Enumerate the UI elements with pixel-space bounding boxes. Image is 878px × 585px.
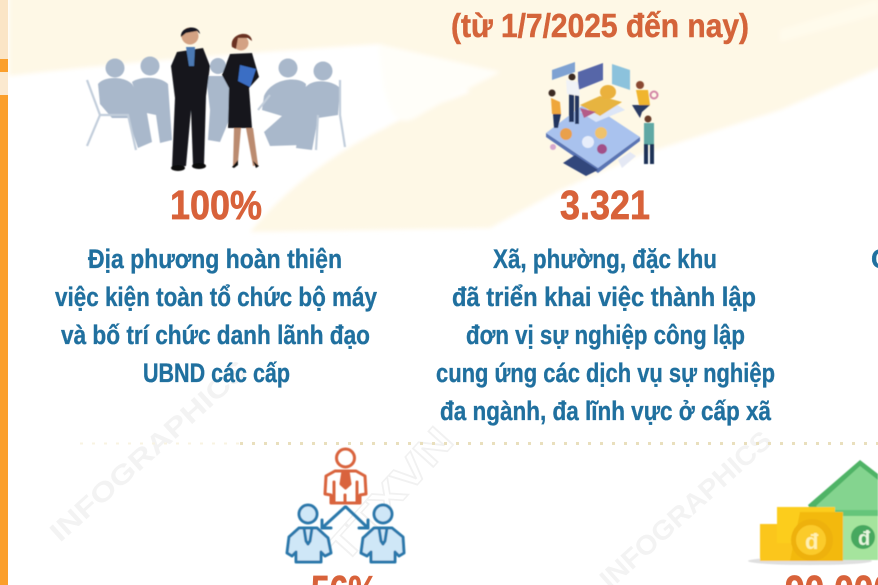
icon: money and coins: đ bbox=[858, 528, 871, 550]
number: 3.321: 3.321 bbox=[560, 182, 650, 228]
watermark: TTXVN bbox=[319, 419, 462, 571]
text block: description 1 bbox=[55, 244, 377, 388]
text block: description 2: cung ứng các dịch vụ sự nghiệp bbox=[436, 358, 775, 388]
heading: date range: (từ 1/7/2025 đến nay) bbox=[451, 7, 749, 44]
text block: description 1: Địa phương hoàn thiện bbox=[88, 244, 342, 274]
text block: description 2: Xã, phường, đặc khu bbox=[493, 244, 717, 274]
icon: isometric digital platform bbox=[546, 62, 658, 176]
text block: description 2: đa ngành, đa lĩnh vực ở cấp xã bbox=[440, 396, 772, 426]
column 2: public service units stat bbox=[436, 62, 775, 426]
text block: description 1: và bố trí chức danh lãnh đạo bbox=[61, 320, 370, 350]
icon: money and coins: đ bbox=[805, 529, 819, 554]
text block: description 2: đơn vị sự nghiệp công lập bbox=[466, 320, 745, 350]
text block: description 2 bbox=[436, 244, 775, 426]
text block: description 1: UBND các cấp bbox=[143, 358, 290, 388]
icon: business people and meeting silhouettes bbox=[87, 28, 345, 171]
text block: description 2: đã triển khai việc thành lập bbox=[452, 282, 756, 312]
icon: people hierarchy bbox=[287, 449, 404, 562]
watermark: INFOGRAPHICS bbox=[44, 355, 254, 547]
number: 100%: 100% bbox=[170, 182, 262, 228]
left edge strip bbox=[0, 0, 8, 585]
text block: description 1: việc kiện toàn tổ chức bộ máy bbox=[55, 282, 377, 312]
icon: money and coins bbox=[748, 460, 878, 565]
background: cream waves bbox=[9, 0, 878, 232]
column 1: organisation stat bbox=[55, 28, 377, 388]
watermark bbox=[44, 355, 778, 585]
